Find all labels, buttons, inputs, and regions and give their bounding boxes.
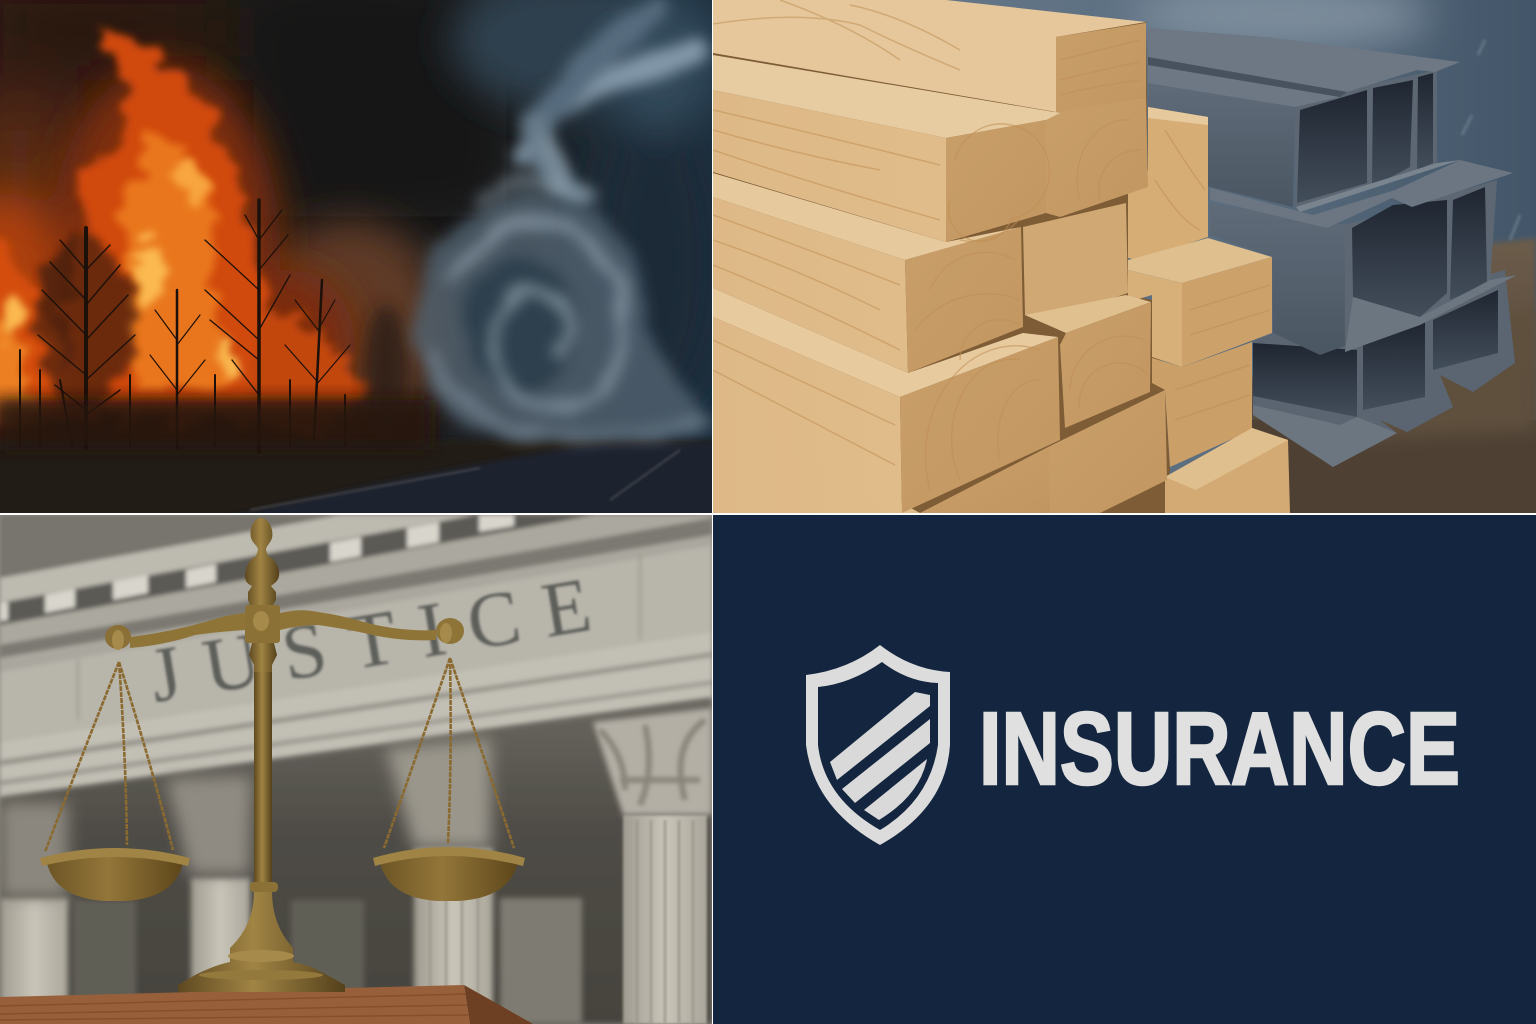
block: rear end pieces — [1128, 107, 1290, 513]
left pan — [48, 857, 182, 901]
rain streaks — [1462, 40, 1520, 240]
wood grain — [713, 0, 1270, 490]
engraved word: JUSTICE — [144, 560, 597, 719]
panel: insurance logo — [713, 515, 1536, 1024]
lumber stack — [713, 0, 1290, 513]
tornado swirl — [414, 190, 720, 439]
post — [254, 672, 272, 884]
fire glow — [0, 65, 355, 430]
foreground trees — [0, 200, 430, 452]
table — [0, 985, 533, 1024]
beam 3 — [713, 173, 1023, 373]
steel I-beams — [1148, 28, 1517, 467]
chains — [45, 658, 514, 852]
storm clouds — [433, 0, 712, 142]
smoke haze between fire and tornado — [274, 200, 440, 412]
panel: courthouse and scales of justice — [0, 515, 712, 1024]
ground and road — [0, 387, 433, 440]
beam 4 — [713, 288, 1060, 513]
icon: shield — [806, 645, 950, 845]
panel: lumber and steel beams — [713, 0, 1536, 513]
base — [178, 892, 345, 992]
beam layer: middle — [1210, 160, 1517, 355]
panel: wildfire and tornado — [0, 0, 720, 520]
ground — [1252, 236, 1536, 420]
black smoke — [0, 0, 528, 231]
block: second row ends — [1023, 97, 1167, 513]
beam 5 — [713, 400, 1050, 513]
right pan — [380, 856, 518, 901]
beam layer: top — [1148, 28, 1460, 212]
beam 2 — [713, 55, 1060, 242]
beam layer: bottom — [1253, 270, 1515, 467]
columns and portico shadow — [0, 698, 712, 1024]
frieze panel joint lines — [78, 555, 640, 720]
beam — [130, 610, 436, 648]
beam 1 — [713, 0, 1146, 112]
courthouse entablature — [0, 515, 712, 798]
flames — [0, 30, 368, 430]
scales of justice — [40, 518, 525, 992]
